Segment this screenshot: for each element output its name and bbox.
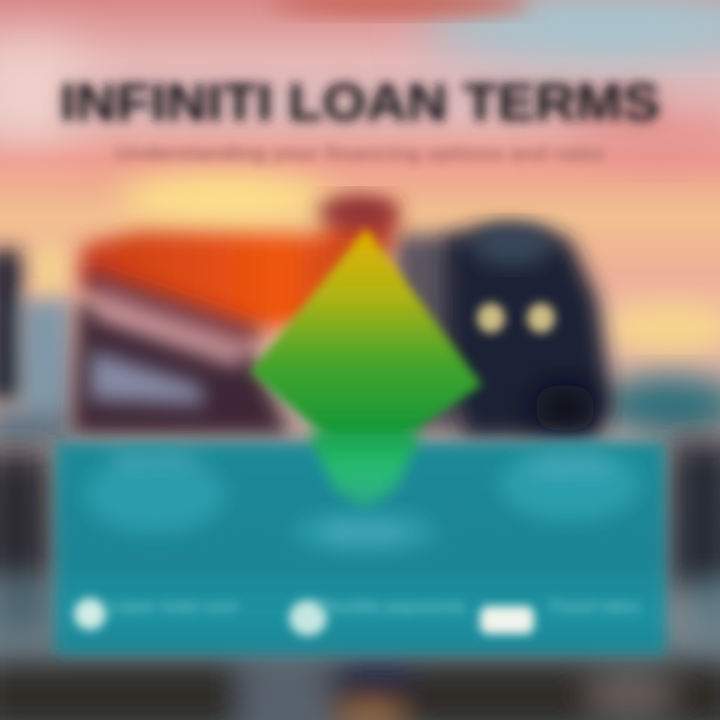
title: INFINITI LOAN TERMS: [60, 74, 660, 132]
truck headlight right: [527, 303, 555, 333]
diamond graphic: [250, 228, 482, 508]
feature row: [74, 597, 640, 636]
diamond lower tip: [308, 432, 422, 508]
column: middle term: Mid Term: [330, 524, 400, 541]
panel: loan terms: [55, 442, 666, 655]
text: middle feature: Flexible payments: [318, 597, 466, 616]
icon: middle: [289, 600, 327, 636]
column: right term: [500, 449, 640, 521]
subtitle: Understanding your financing options and rates: [115, 143, 605, 165]
title: INFINITI LOAN TERMS: [60, 74, 660, 132]
icon: right: [480, 606, 534, 634]
column: left term: Short Term: [113, 449, 197, 466]
truck cab: [445, 226, 612, 438]
background: left buildings: [0, 250, 70, 445]
background: dark city base: [0, 440, 720, 720]
truck bumper: [533, 384, 597, 432]
text: left feature: Lower total cost: [107, 597, 238, 616]
truck trailer: dark base: [72, 300, 290, 435]
truck trailer: orange top: [82, 205, 395, 330]
truck cab window: [470, 225, 554, 265]
column: middle term: [293, 512, 437, 552]
text: right feature: Fixed rates: [550, 597, 640, 616]
illustration: truck: [72, 196, 612, 438]
column: right term: Long Term: [529, 457, 611, 474]
truck connector between trailer and cab: [395, 235, 465, 430]
icon: left: [74, 598, 106, 630]
truck trailer: dark red cap: [318, 196, 398, 228]
truck trailer: pale stripes: [85, 268, 265, 405]
truck headlight left: [477, 303, 505, 333]
column: left term: [85, 449, 225, 533]
